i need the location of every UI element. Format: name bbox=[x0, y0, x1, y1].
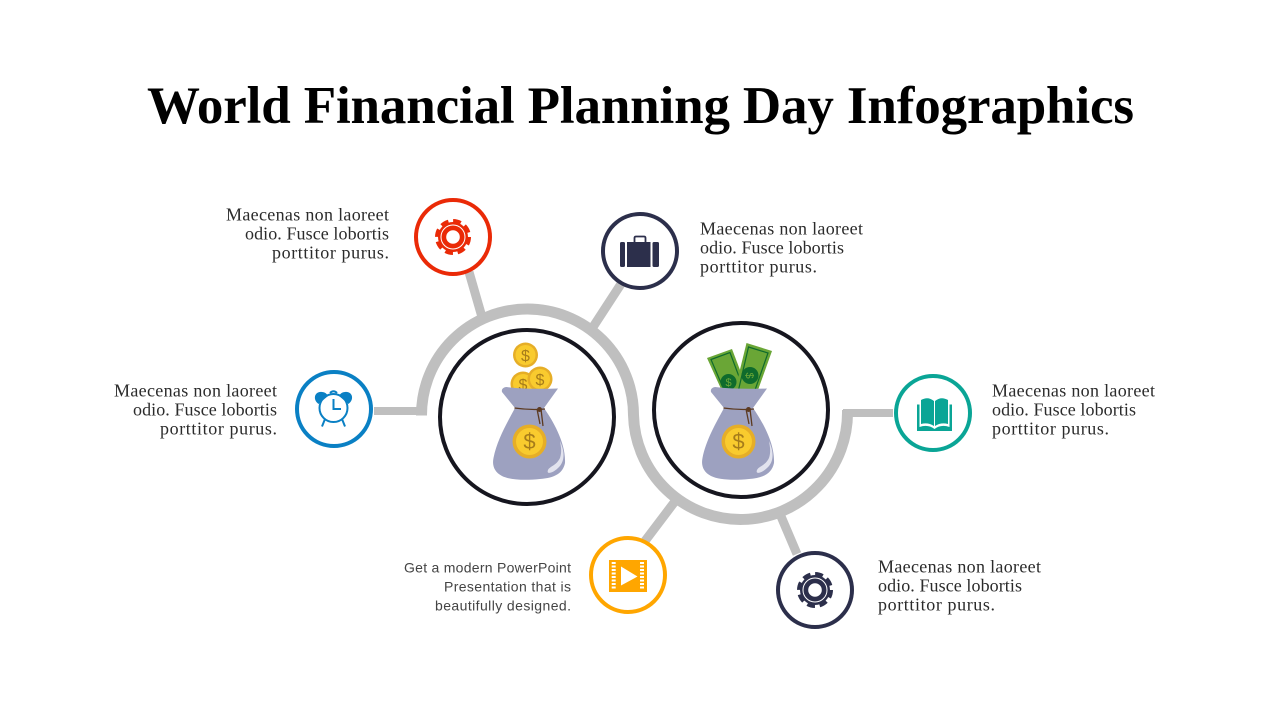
text: book caption: porttitor purus. bbox=[992, 418, 1109, 438]
item: navy gear badge bbox=[778, 553, 852, 627]
text: video caption bbox=[404, 560, 571, 614]
title: World Financial Planning Day Infographics bbox=[147, 77, 1134, 135]
icon: briefcase bbox=[620, 236, 659, 267]
circle outline bbox=[440, 330, 614, 504]
item: briefcase badge bbox=[603, 214, 677, 288]
text: navy gear caption: odio. Fusce lobortis bbox=[878, 576, 1022, 596]
icon: falling coins bbox=[510, 342, 552, 396]
text: video caption: Get a modern PowerPoint bbox=[404, 560, 571, 576]
item: alarm clock badge bbox=[297, 372, 371, 446]
text: book caption bbox=[992, 380, 1155, 438]
text: briefcase caption bbox=[700, 218, 863, 276]
text: alarm clock caption: porttitor purus. bbox=[160, 418, 277, 438]
text: alarm clock caption bbox=[114, 380, 277, 438]
icon: bag: $ bbox=[732, 429, 745, 454]
text: red gear caption: odio. Fusce lobortis bbox=[245, 224, 389, 244]
panel: left money bag with coins bbox=[440, 330, 614, 504]
icon: bag bbox=[702, 387, 774, 480]
icon: falling coins: $ bbox=[519, 377, 528, 394]
item: red gear badge bbox=[416, 200, 490, 274]
item: book badge bbox=[896, 376, 970, 450]
text: briefcase caption: porttitor purus. bbox=[700, 256, 817, 276]
icon: bag bbox=[493, 387, 565, 480]
circle outline bbox=[654, 323, 828, 497]
text: red gear caption: porttitor purus. bbox=[272, 242, 389, 262]
text: navy gear caption: porttitor purus. bbox=[878, 594, 995, 614]
text: video caption: beautifully designed. bbox=[435, 598, 571, 614]
icon: banknotes: $ bbox=[743, 372, 755, 379]
text: briefcase caption: Maecenas non laoreet bbox=[700, 218, 863, 238]
text: alarm clock caption: Maecenas non laoreet bbox=[114, 380, 277, 400]
icon: open book bbox=[917, 398, 952, 431]
text: book caption: Maecenas non laoreet bbox=[992, 380, 1155, 400]
icon: gear bbox=[438, 222, 468, 252]
icon: film strip with play bbox=[609, 560, 647, 592]
icon: bag: $ bbox=[523, 429, 536, 454]
panel: right money bag with banknotes bbox=[654, 323, 828, 497]
text: red gear caption bbox=[226, 204, 389, 262]
icon: falling coins: $ bbox=[521, 348, 530, 365]
text: video caption: Presentation that is bbox=[444, 578, 571, 594]
text: navy gear caption: Maecenas non laoreet bbox=[878, 556, 1041, 576]
icon: banknotes: $ bbox=[725, 377, 732, 389]
connector network: S-shaped arcs and spokes bbox=[374, 272, 893, 554]
icon: falling coins: $ bbox=[536, 372, 545, 389]
icon: gear bbox=[800, 574, 830, 606]
text: book caption: odio. Fusce lobortis bbox=[992, 400, 1136, 420]
item: video badge bbox=[591, 538, 665, 612]
text: briefcase caption: odio. Fusce lobortis bbox=[700, 238, 844, 258]
text: red gear caption: Maecenas non laoreet bbox=[226, 204, 389, 224]
text: alarm clock caption: odio. Fusce lobortis bbox=[133, 400, 277, 420]
text: navy gear caption bbox=[878, 556, 1041, 614]
icon: banknotes bbox=[707, 343, 772, 391]
icon: alarm clock bbox=[315, 391, 352, 426]
